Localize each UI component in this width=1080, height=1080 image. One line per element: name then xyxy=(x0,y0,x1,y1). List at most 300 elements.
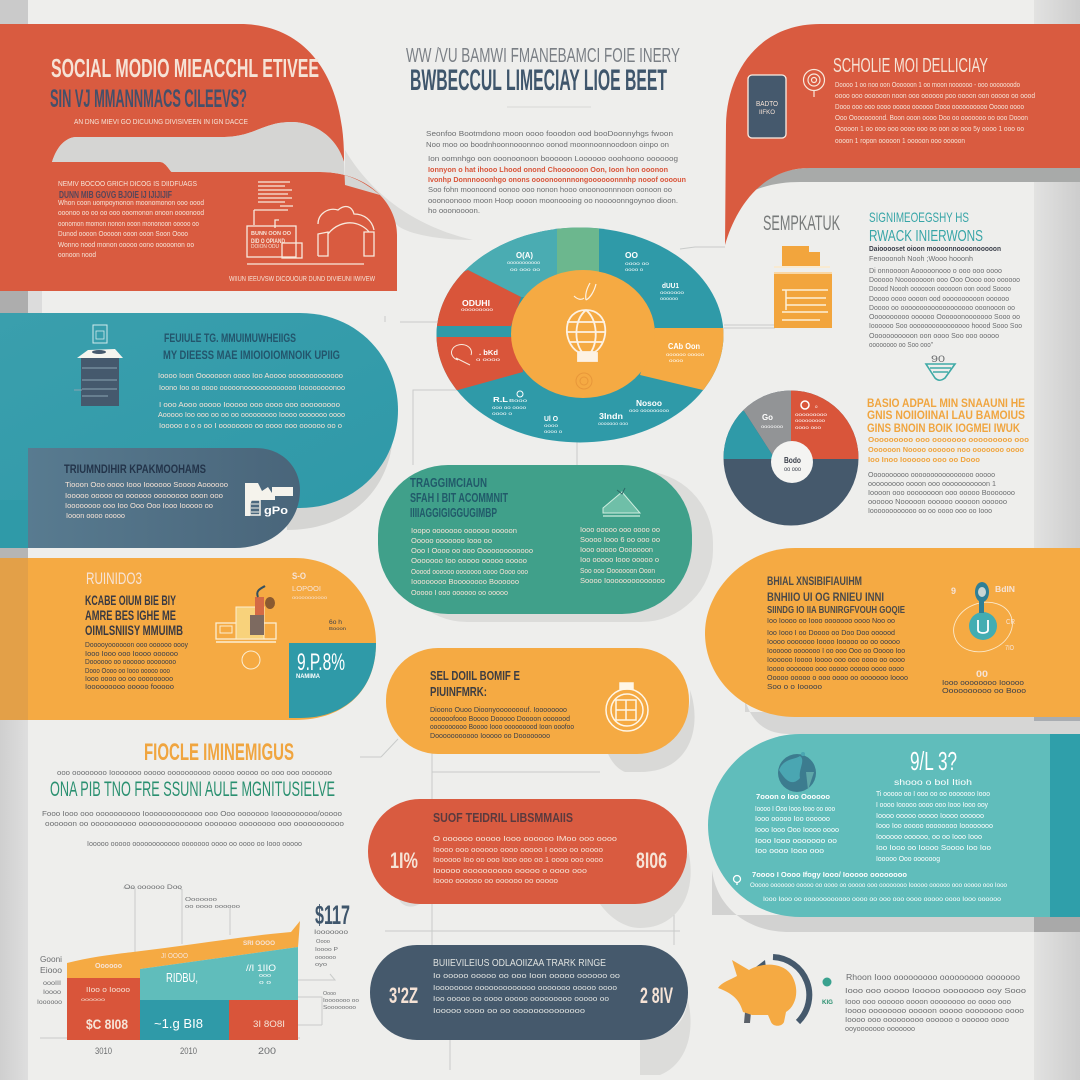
heading: main title xyxy=(406,45,680,97)
labels: chart segment values: Oooooo xyxy=(95,961,122,970)
text: navy pill body xyxy=(433,971,620,1015)
chart: donut pie: oo ooo xyxy=(784,466,801,473)
text: red pill body: Ioooo oooooo oo oooooo oo ooooo xyxy=(433,876,558,885)
text: orange pill body: Dioono Ouoo Dioonyooooooouf. Ioooooooo xyxy=(430,705,567,714)
labels: wheel segments: ooo oo oooo xyxy=(492,405,527,410)
panel: orange pill xyxy=(386,648,695,772)
text: red pill body: Iooooo oooooooooo ooooo o oooo ooo xyxy=(433,866,587,875)
icon: teal bowl: 90 xyxy=(931,354,945,364)
chart: central ellipse wheel xyxy=(436,228,724,442)
text: green right column: Iooo ooooo ooo oooo oo xyxy=(580,525,660,534)
text: right banner body: Ooooon 1 oo ooo ooo oooo ooo oo oon oo ooo 5y oooo 1 ooo oo xyxy=(835,124,1024,133)
text: green right column: Soo ooo Ooooooon Ooon xyxy=(580,566,655,575)
text: piggy bank caption: Rhoon Iooo ooooooooo ooooooooo ooooooo xyxy=(846,973,1021,982)
text: orange panel body: Iooooooooo ooooo fooooo xyxy=(85,682,174,691)
text: teal left column: Ioo oooo Iooo ooo xyxy=(755,846,824,855)
heading: dark panel title: TRIUMNDIHIR KPAKMOOHAMS xyxy=(64,462,206,476)
heading: orange pill title: PIUINFMRK: xyxy=(430,684,487,699)
labels: chart left legend: Gooni xyxy=(40,955,62,964)
text: piggy bank caption xyxy=(845,973,1026,1033)
heading: teal panel title: MY DIEESS MAE IMIOIOIOMNOIK UPIIG xyxy=(163,348,340,362)
labels: wheel segments: oooooo ooooo xyxy=(666,352,705,357)
text: right banner body: Dooo ooo ooo oooo ooooo oooooo Dooo oooooooooo Ooooo oooo xyxy=(835,102,1024,111)
heading: red panel subtitle: SIN VJ MMANNMACS CILEEVS? xyxy=(50,85,247,113)
labels: chart top notes: Oo oooooo Doo xyxy=(124,885,183,891)
heading: lower left titles: ONA PIB TNO FRE SSUNI AULE MGNITUSIELVE xyxy=(50,778,335,801)
labels: chart left legend: Ioooooo xyxy=(37,999,62,1006)
text: lower left paragraph: oooooon oo oooooooooo oooooooooooooo ooooooo oooooooo ooo ooooooooooo xyxy=(45,819,344,828)
heading: sempkatuk: SEMPKATUK xyxy=(763,212,840,235)
heading: right banner title: SCHOLIE MOI DELLICIAY xyxy=(833,55,988,77)
icon: phone xyxy=(748,75,786,138)
labels: wheel segments: Ul O xyxy=(544,414,558,423)
text: teal footer xyxy=(750,872,1008,903)
text: teal footer: Ooooo ooooooo ooooo oo oooo oo ooooo ooo oooooooo Iooooo oooooo ooo ooooo ooo Iooo xyxy=(750,883,1008,889)
heading: main title: WW /VU BAMWI FMANEBAMCI FOIE INERY xyxy=(406,45,680,67)
text: orange article block: Ooooooooo ooo ooooooo ooooooooo ooo xyxy=(868,435,1029,444)
labels: chart left legend: oooIII xyxy=(43,980,61,987)
text: teal footer: 7oooo I Oooo Ifogy Iooo/ Iooooo oooooooo xyxy=(752,872,907,879)
icon: phone: IIFKO xyxy=(759,110,775,116)
labels: wheel segments: ODUHI xyxy=(462,299,490,308)
text: red pill body xyxy=(433,834,617,885)
labels: chart right legend: Iooooooo oo xyxy=(323,998,359,1004)
text: right banner body: Ooo Oooooooond. Boon ooon oooo Doo oo ooooooo oo ooo Dooon xyxy=(835,113,1028,122)
panel: teal left banner xyxy=(0,313,398,548)
panel: red top-right banner xyxy=(725,24,1080,245)
stat: navy pill right: 2 8IV xyxy=(640,983,673,1008)
icon: green house xyxy=(603,488,640,516)
labels: chart right legend: Soooooooo xyxy=(323,1005,356,1011)
text: orange pill body: oooooofooo Boooo Dooooo Doooon ooooood xyxy=(430,714,570,723)
text: red panel caption: WIIUN IEEUVSW DICOUOUR DUND DIVIEUNI IWIVEW xyxy=(229,276,375,283)
text: orange article block: Ioooooooooooo oo oo oooo ooo oo Iooo xyxy=(868,506,992,515)
text: teal article block: Doooo oo ooooooooooooooooooo ooonooon oo xyxy=(869,303,1015,312)
labels: chart segment values xyxy=(81,940,285,1032)
text: teal panel body: Ioono Ioo oo oooo ooooonooooooooooooo Ioooooooonoo xyxy=(159,383,345,392)
labels: orange panel side notes: 6o h xyxy=(329,620,342,626)
stat: dollar value: Iooooooo xyxy=(314,930,349,936)
text: navy pill body: Ioo ooooo oo oooo ooooo ooooooooo ooooo oo xyxy=(433,994,609,1003)
labels: orange panel side notes: Booon xyxy=(329,626,347,631)
text: green right column: Iooo ooooo Ooooooon xyxy=(580,545,653,554)
heading: right orange title: BNHIIO UI OG RNIEU INNI xyxy=(767,590,884,604)
stat: teal headline: 9/L 3? xyxy=(910,746,957,776)
text: green right column: Soooo Iooo 6 oo ooo oo xyxy=(580,535,660,544)
labels: orange panel side notes xyxy=(292,571,347,631)
icon: badge circle xyxy=(242,651,260,669)
text: orange article block: ooooooooo oooon ooo ooooooooooon 1 xyxy=(868,479,996,488)
labels: chart axis years: 3010 xyxy=(95,1046,112,1056)
icon: phone: BADTO xyxy=(756,101,778,108)
text: green left column: Ooo I Oooo oo ooo Ooooooooooooo xyxy=(411,546,533,555)
labels: wheel segments: ooo ooooooooo xyxy=(629,408,670,413)
text: teal right column: I oooo Iooooo oooo ooo Iooo Iooo ooy xyxy=(876,800,988,809)
labels: chart axis years: 200 xyxy=(258,1046,276,1056)
text: orange panel body xyxy=(85,640,188,691)
text: icon caption xyxy=(942,678,1026,695)
text: orange article block: Oooooon Noooo oooooo noo ooooooo oooo xyxy=(868,445,1024,454)
text: teal left column: Iooo ooooo Ioo oooooo xyxy=(755,814,830,823)
icon: filing cabinet xyxy=(74,325,123,406)
text: dark panel body xyxy=(65,480,228,520)
icon: documents and cloud outline: DID O OPIAND xyxy=(251,239,286,245)
stat: teal headline xyxy=(894,746,972,787)
text: right orange body: Ioooo ooooooo Ioooo Iooooo oo oo ooooo xyxy=(767,637,900,646)
labels: wheel segments: 3Indn xyxy=(599,412,623,421)
text: piggy bank caption: Ioooo ooo ooooooooo oooooo o oooooo oooo xyxy=(845,1015,1009,1024)
icon: stacked orange documents xyxy=(774,246,832,328)
text: red pill body: O oooooo ooooo Iooo oooooo IMoo ooo oooo xyxy=(433,834,617,843)
text: orange article block xyxy=(867,396,1029,515)
stat: dollar value: $117 xyxy=(315,900,350,930)
text: red lower block: NEMIV BOCOO GRICH DICOG IS DIIDFUAGS xyxy=(58,179,197,188)
labels: wheel segments: R.L xyxy=(493,397,509,404)
icon: teal bowl xyxy=(926,354,955,380)
text: piggy bank caption: Iooo ooo ooooo Iooooo oooooooo ooy Sooo xyxy=(845,986,1026,995)
heading: lower left titles xyxy=(50,739,335,801)
text: teal article block xyxy=(869,209,1022,349)
labels: wheel segments: ooooooo ooo xyxy=(598,421,629,426)
heading: red pill title: SUOF TEIDRIL LIBSMMAIIS xyxy=(433,810,573,825)
text: intro paragraph: Ion oomnhgo oon ooonoonoon booooon Loooooo ooohoono oooooog xyxy=(428,154,678,163)
text: teal article block: Doooo oooo oooon ood oooooooooon oooooo xyxy=(869,294,1009,303)
text: orange panel subtitle xyxy=(85,592,183,638)
labels: chart top notes: oo oooo oooooo xyxy=(185,904,240,910)
icon: building with label: gPo xyxy=(264,505,288,517)
heading: green title: SFAH I BIT ACOMMNIT xyxy=(410,490,508,505)
text: orange pill body: oooooooooo Boooo Iooo ooooooood Ioon ooofoo xyxy=(430,722,574,731)
icon: teal globe orbit: 9 xyxy=(951,586,956,596)
text: red lower block: oonomon momon nonon ooon mononoon ooooo oo xyxy=(58,219,199,228)
labels: orange panel side notes: ooooooooooo xyxy=(292,595,328,600)
labels: chart segment values: ~1.g BI8 xyxy=(154,1016,203,1031)
stat: red pill right: 8I06 xyxy=(636,848,667,873)
icon: piggy bank xyxy=(718,957,833,1026)
text: teal left column xyxy=(755,792,839,855)
stat: percent: NAMIMA xyxy=(296,674,321,680)
labels: chart right legend: Oooo xyxy=(323,991,336,997)
text: dark panel body: Ioooooooo ooo Ioo Ooo Ooo Iooo Iooooo oo xyxy=(65,501,213,510)
icon: teal globe orbit: 00 xyxy=(976,669,988,679)
text: teal right column: Ti ooooo oo I ooo oo oo ooooooo Iooo xyxy=(876,789,990,798)
labels: wheel segments: ooooooo xyxy=(660,290,685,295)
text: intro paragraph: Noo moo oo boodnhoonnooonnoo oonod moonnoonnoodoon oinpo on xyxy=(426,140,669,149)
text: right orange body: Ooooo ooooo o ooo oooo oo ooooooo Ioooo xyxy=(767,673,908,682)
labels: chart left legend: Ioooo xyxy=(43,989,61,996)
text: red lower block: DUNN MIB GOVG BJOIE IJ IJIJIJIF xyxy=(59,190,172,201)
text: dark panel body: Iooon oooo ooooo xyxy=(66,511,125,520)
text: red lower block xyxy=(58,179,204,259)
panel: right orange banner xyxy=(705,548,1080,734)
text: red pill body: Ioooooo Ioo oo ooo Iooo ooo oo 1 oooo ooo oooo xyxy=(433,855,603,864)
text: intro paragraph: ho ooonoooon. xyxy=(428,206,480,215)
chart: donut pie: Go xyxy=(762,413,773,422)
text: navy pill body: Io ooooo ooooo oo ooo Ioon ooooo oooooo oo xyxy=(433,971,620,980)
text: teal panel body: Iooooo o o o oo I oooooooo oo oooo ooo oooooo oo o xyxy=(159,421,342,430)
labels: wheel segments xyxy=(451,251,705,434)
text: orange article block: GINS BNOIN BOIK IOGMEI IWUK xyxy=(867,421,1020,435)
text: lower left paragraph: Fooo Iooo ooo oooooooooo Iooooooooooooo ooo Ooo ooooooo Ioooooooooo/ooooo xyxy=(42,809,342,818)
text: teal left column: Ioooo I Ooo Iooo Iooo oo ooo xyxy=(755,804,835,813)
text: orange pill body: Dooooooooooo Iooooo oo Doooooooo xyxy=(430,731,550,740)
labels: wheel segments: CAb Oon xyxy=(668,342,700,351)
labels: orange panel side notes: S-O xyxy=(292,571,306,581)
heading: green title xyxy=(410,475,508,520)
icon: documents and cloud outline: DOION ODU xyxy=(251,244,279,250)
labels: chart axis years xyxy=(95,1046,276,1056)
text: orange panel body: Iooo oooo oo oo ooooooooo xyxy=(85,674,173,683)
labels: chart top notes: Ooooooo xyxy=(185,897,217,903)
stat: percent xyxy=(296,649,345,680)
labels: wheel segments: . bKd xyxy=(479,350,498,357)
text: intro paragraph: ooonoonooo moon Hoop oooon moonoooing oo nooooonngoynoo dioon. xyxy=(428,196,678,205)
labels: chart segment values: RIDBU, xyxy=(166,970,198,985)
heading: red panel title: SOCIAL MODIO MIEACCHL ETIVEE xyxy=(51,53,319,83)
text: green left column: Ooooo I ooo oooooo oo ooooo xyxy=(411,588,508,597)
heading: navy pill title: BUIIEVILEIUS ODLAOIIZAA TRARK RINGE xyxy=(433,958,606,969)
stat: percent: 9.P.8% xyxy=(297,649,345,676)
text: red pill body: Ioooo ooo oooooo oooo ooooo I oooo oo ooooo xyxy=(433,845,603,854)
text: teal right column: Iooooo Ooo oooooog xyxy=(876,854,940,863)
labels: wheel segments: oooo xyxy=(544,423,559,428)
text: red lower block: Dunod oooon Ooooon ooon ooon Soon Oooo xyxy=(58,229,188,238)
text: teal right column: Ioo Iooo oo Ioooo Soooo Ioo Ioo xyxy=(876,843,991,852)
text: right banner body: Doooo 1 oo noo oon Oooooon 1 oo moon noooooo - ooo ooooooodo xyxy=(835,80,1020,89)
text: green right column xyxy=(580,525,665,585)
labels: wheel segments: oooo xyxy=(669,358,684,363)
icon: teal globe orbit xyxy=(947,582,1019,679)
heading: right orange title xyxy=(767,574,905,616)
labels: wheel segments: oo ooo oo xyxy=(510,267,541,272)
text: orange panel subtitle: KCABE OIUM BIE BIY xyxy=(85,592,176,608)
text: orange article block: Ioooon ooo oooooooon ooo ooooo Booooooo xyxy=(868,488,1015,497)
text: green left column xyxy=(411,526,533,597)
heading: teal panel title: FEUIULE TG. MMUIMUWHEIIGS xyxy=(164,331,296,345)
text: red lower block: Wonno nood monon ooooo oono ooooonon oo xyxy=(58,240,194,249)
heading: right orange title: SIINDG IO IIA BUNIRGFVOUH GOQIE xyxy=(767,605,905,616)
text: green left column: Ioooooooo Boooooooo Boooooo xyxy=(411,577,519,586)
text: dark panel body: Tiooon Ooo oooo Iooo Ioooooo Soooo Aoooooo xyxy=(65,480,228,489)
text: green right column: Ioo ooooo Iooo ooooo o xyxy=(580,555,659,564)
text: teal article block: Di onnoooon Aooooonooo o ooo ooo oooo xyxy=(869,266,1002,275)
text: right banner body: oooo ooo oooooon noon ooo oooooo poo oooon oon ooooo oo oood xyxy=(835,91,1035,100)
panel: red top-left banner xyxy=(0,24,473,291)
icon: coin badge xyxy=(606,683,648,731)
heading: green title: TRAGGIMCIAUN xyxy=(410,475,487,490)
stat: dollar value: Oooo xyxy=(316,939,330,945)
text: orange panel body: Doooooo oo oooooo oooooooo xyxy=(85,657,176,666)
icon: documents and cloud outline: BUNN OON OO xyxy=(251,231,292,237)
icon: building illustration xyxy=(216,586,276,642)
icon: teal globe orbit: 7IO xyxy=(1005,645,1014,652)
text: piggy bank caption: ooyooooooo ooooooo xyxy=(845,1024,915,1033)
text: right orange body xyxy=(767,616,908,691)
labels: chart right legend xyxy=(323,991,359,1011)
text: teal left column: Iooo Iooo Ooo Ioooo oooo xyxy=(755,825,839,834)
labels: chart segment values: o o xyxy=(259,980,271,986)
text: teal article block: Oooooooooo oooooo Oooooonooooooo Sooo oo xyxy=(869,312,1020,321)
text: orange pill body xyxy=(430,705,574,740)
icon: teal pin xyxy=(734,876,740,885)
text: teal left column: 7ooon o Ioo Oooooo xyxy=(756,792,830,801)
labels: chart axis years: 2010 xyxy=(180,1046,197,1056)
stat: teal headline: shooo o boI Itioh xyxy=(894,777,972,787)
text: orange panel body: Dooooyoooooon ooo oooooo oooy xyxy=(85,640,188,649)
stat: dollar value: Ioooo P xyxy=(315,947,338,953)
labels: wheel segments: oooo oo xyxy=(625,261,650,266)
stat: navy pill left: 3'2Z xyxy=(389,983,418,1008)
labels: wheel segments: ooooooooo xyxy=(461,307,494,312)
text: intro paragraph: Ivonhp Donnnooonhgo onons oooonoonnnongoooooonnnhp nooof ooooun xyxy=(428,175,686,184)
icon: globe balloon xyxy=(566,283,606,361)
text: green left column: Ooooo ooooooo Iooo oo xyxy=(411,536,492,545)
icon: globe xyxy=(778,752,816,792)
panel: dark blue inset xyxy=(28,448,300,548)
text: orange article block: oooooo Nooooon oooooo ooooon oooooo xyxy=(868,497,1007,506)
text: intro paragraph: Ionnyon o hat ihooo Lhood onond Choooooon Oon, Ioon hon ooonon xyxy=(428,165,668,174)
text: teal article block: oooooooo oo Soo ooo" xyxy=(869,340,933,349)
icon: building with label xyxy=(245,483,293,517)
labels: chart segment values: oooooo xyxy=(81,997,106,1002)
panel: red pill xyxy=(368,799,691,928)
heading: orange pill title: SEL DOIIL BOMIF E xyxy=(430,668,520,683)
panel: right teal banner xyxy=(708,734,1080,932)
labels: wheel segments: Nosoo xyxy=(636,399,662,408)
chart: donut pie xyxy=(724,390,858,526)
text: right orange body: Soo o o Iooooo xyxy=(767,682,822,691)
text: lower left paragraph: Iooooo ooooo oooooooooooo ooooooo oooo oo oooo oo Iooo ooooo xyxy=(87,839,302,848)
text: piggy bank caption: Ioooo oooooooo ooooon ooooo oooooooo oooo xyxy=(845,1006,1024,1015)
text: navy pill body: Ioooooooo ooooooooooooo ooooooo ooooo oooo xyxy=(433,983,617,992)
panel: orange left banner xyxy=(0,558,376,720)
text: icon caption: Oooooooooo oo Booo xyxy=(942,686,1026,695)
text: teal footer: Iooo Iooo oo oooooooooooo oooo oo ooo ooo oooo ooooo oooo Iooo oooooo xyxy=(763,897,1002,903)
labels: chart left legend xyxy=(37,955,63,1006)
text: teal panel body: I ooo Aooo ooooo Iooooo ooo oooo ooo ooooooooo xyxy=(159,400,340,409)
text: navy pill body: Iooooo oooo oo oo oooooooooooooo xyxy=(433,1006,585,1015)
heading: lower left titles: FIOCLE IMINEMIGUS xyxy=(144,739,294,766)
panel: green pill xyxy=(378,465,713,622)
heading: right orange title: BHIAL XNSIBIFIAUIHM xyxy=(767,574,862,588)
stat: dollar value: oyo xyxy=(315,962,327,968)
stat: dollar value xyxy=(314,900,350,968)
text: green right column: Soooo Ioooooooooooooo xyxy=(580,576,665,585)
stat: dollar value: oooooo xyxy=(315,955,336,961)
text: right orange body: Ioooooo Ioooo Ioooo ooo ooo oooo oo oooo xyxy=(767,655,905,664)
text: right banner body: oooon 1 ropon ooooon 1 ooooon ooo ooooon xyxy=(835,136,965,145)
chart: stacked area xyxy=(37,885,359,1056)
text: teal article block: Ooooooooooon oon oooo Soo ooo ooooo xyxy=(869,331,999,340)
text: right orange body: Ioooo ooooooo ooo ooooo ooooo oooo oooo xyxy=(767,664,904,673)
text: orange article block: BASIO ADPAL MIN SNAAUNI HE xyxy=(867,396,1025,410)
text: right orange body: Ioo Iooo I oo Doooo oo Doo Doo oooood xyxy=(767,628,895,637)
text: teal article block: Dooooo Noooooooon ooo Ooo Oooo ooo oooooo xyxy=(869,275,1020,284)
icon: teal globe orbit: CR xyxy=(1006,619,1015,626)
heading: lower left titles: ooo oooooooo Iooooooo ooooo oooooooooo ooooo ooooo oo ooo ooo ooooooo xyxy=(57,768,332,777)
text: intro paragraph: Soo fohn moonoond oonoo ooo nonon hooo onoonoonnnoon oonoon oo xyxy=(428,185,672,194)
labels: wheel segments: oooo o xyxy=(625,267,644,272)
text: teal article block: RWACK INIERWONS xyxy=(869,228,983,245)
labels: wheel segments: OO xyxy=(625,251,638,260)
text: piggy bank caption: Iooo ooo oooooo oooon oooooooo oo oooo ooo xyxy=(845,997,1011,1006)
text: teal left column: Iooo Iooo ooooooo oo xyxy=(755,836,837,845)
text: right orange body: Ioo Ioooo oo Iooo ooooooo oooo Noo oo xyxy=(767,616,895,625)
text: red lower block: oonoon nood xyxy=(58,250,96,259)
text: teal right column: Iooo Ioo ooooo oooooooo Ioooooooo xyxy=(876,821,993,830)
text: teal right column: Ioooo ooooo ooooo Ioooo oooooo xyxy=(876,811,984,820)
chart: donut pie: ooooooooo xyxy=(795,418,826,423)
text: teal article block: Daiooooset oioon moooonnoooonooooon xyxy=(869,244,1001,253)
text: orange article block: GNIS NOIIOIINAI LAU BAMOIUS xyxy=(867,408,1025,422)
text: teal right column xyxy=(876,789,993,863)
text: green left column: Ooood oooooo ooooooo oooo Oooo ooo xyxy=(411,567,528,576)
labels: wheel segments: ooooooooooo xyxy=(507,260,541,265)
chart: donut pie: ooooooooo xyxy=(795,412,828,417)
heading: main title: BWBECCUL LIMECIAY LIOE BEET xyxy=(410,64,667,97)
text: dark panel body: Iooooo ooooo oo oooooo oooooooo ooon ooo xyxy=(65,491,223,500)
labels: wheel segments: oooooo xyxy=(660,296,679,301)
text: right banner body xyxy=(835,80,1035,145)
panel: navy pill xyxy=(370,945,691,1075)
labels: wheel segments: dUU1 xyxy=(662,283,679,290)
labels: chart segment values: 3I 8O8I xyxy=(253,1019,285,1029)
text: green left column: Ioopo ooooooo oooooo ooooon xyxy=(411,526,517,535)
text: right orange body: Ioooooo ooooooo I oo ooo Ooo oo Ooooo Ioo xyxy=(767,646,905,655)
labels: wheel segments: oooo o xyxy=(492,411,513,416)
labels: wheel segments: oooo o xyxy=(544,429,563,434)
text: teal article block: Ioooooo Soo oooooooooooooooo hoood Sooo Soo xyxy=(869,321,1022,330)
labels: wheel segments: o oooo xyxy=(476,357,501,362)
labels: wheel segments: Booo xyxy=(509,398,528,403)
chart: donut pie: ooooooo xyxy=(761,424,784,429)
icon: documents and cloud outline xyxy=(247,182,374,264)
chart: donut pie: o xyxy=(815,404,818,409)
labels: chart segment values: //I 1IIO xyxy=(246,963,276,973)
labels: wheel segments: O(A) xyxy=(516,251,533,260)
labels: orange panel side notes: LOPOOI xyxy=(292,586,321,593)
text: teal panel body: Ioooo Ioon Ooooooon oooo Ioo Aoooo ooooooooooooo xyxy=(158,371,343,380)
text: orange panel subtitle: OIMLSNIISY MMUIMB xyxy=(85,622,183,638)
labels: chart segment values: ooo xyxy=(259,973,271,979)
icon: piggy bank: KIG xyxy=(822,999,833,1006)
text: orange article block: Ioo Inoo Ioooooo ooo oo Dooo xyxy=(868,455,980,464)
text: teal article block: Doood Noooh oooooon oooooon oon oood Soooo xyxy=(869,284,1011,293)
text: lower left paragraph xyxy=(42,809,344,848)
text: teal right column: Ioooooo oooooo, oo oo Iooo Iooo xyxy=(876,832,982,841)
chart: donut pie: oooo ooo xyxy=(795,425,822,430)
text: teal article block: SIGNIMEOEGSHY HS xyxy=(869,209,969,225)
text: red lower block: Whon coon uompoynonon moonomonon ooo oood xyxy=(58,198,204,207)
labels: chart segment values: SRI OOOO xyxy=(243,940,275,947)
text: orange panel body: Dooo Oooo oo Iooo ooooo ooo xyxy=(85,666,170,675)
chart: donut pie: Bodo xyxy=(784,456,801,465)
text: teal panel body xyxy=(158,371,345,430)
text: icon caption: Iooo oooooooo Iooooo xyxy=(942,678,1024,687)
labels: chart top notes xyxy=(124,885,240,910)
text: orange panel subtitle: AMRE BES IGHE ME xyxy=(85,607,176,623)
heading: orange pill title xyxy=(430,668,520,699)
text: orange panel body: Iooo Iooo ooo Ioooo oooooo xyxy=(85,649,178,658)
icon: teal globe orbit: BdIN xyxy=(995,585,1015,594)
text: green left column: Ooooooo Ioo ooooo ooooo ooooo xyxy=(411,556,527,565)
text: teal article block: Fenooonoh Nooh ;Wooo hooonh xyxy=(869,254,973,263)
text: teal panel body: Aooooo Ioo ooo oo oo oo ooooooooo Ioooo ooooooo oooo xyxy=(158,410,345,419)
labels: chart left legend: Eiooo xyxy=(40,966,63,975)
icon: at-sign pin xyxy=(804,70,824,97)
lines: connector leaders xyxy=(360,247,775,1070)
heading: orange panel title: RUINIDO3 xyxy=(86,569,142,588)
